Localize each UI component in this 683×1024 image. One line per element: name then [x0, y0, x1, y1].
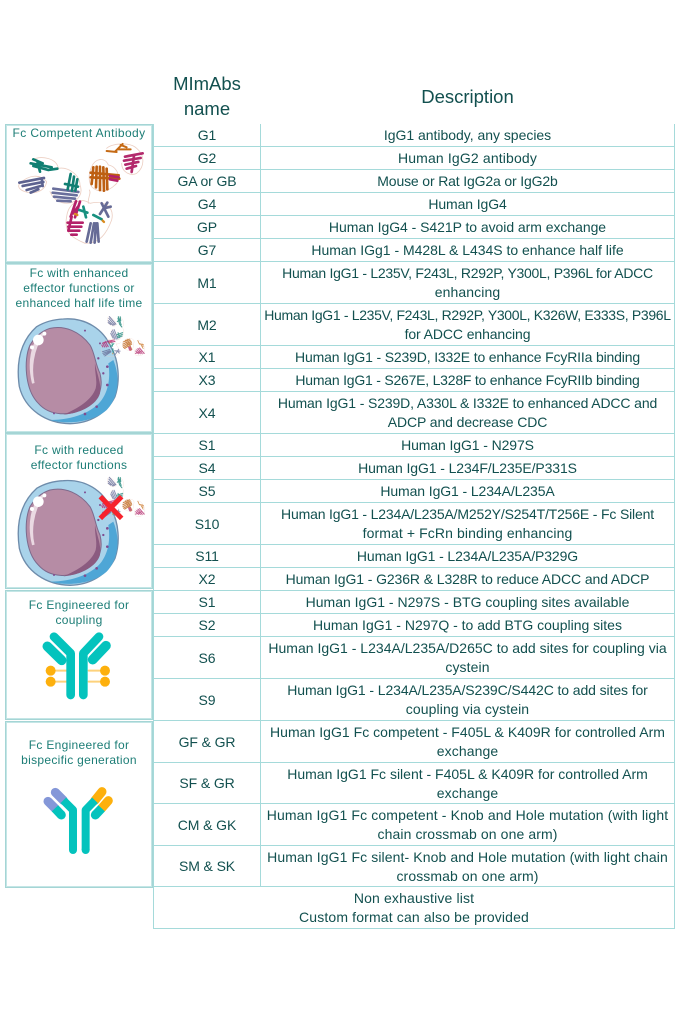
row S4: Human IgG1 - L234F/L235E/P331S [358, 460, 577, 476]
row G4: Human IgG4 [428, 196, 507, 212]
row S10: S10 [195, 516, 219, 532]
row S5: S5 [199, 483, 215, 499]
row GF & GR: GF & GR [179, 734, 235, 750]
panel heading: enhanced effector functions [16, 266, 142, 310]
row GF & GR: Human IgG1 Fc competent - F405L & K409R for controlled Arm [270, 724, 665, 740]
panel: Fc Engineered for bispecific generation [5, 721, 153, 888]
row S4: S4 [199, 460, 215, 476]
row G4: G4 [198, 196, 216, 212]
panel heading: coupling [29, 598, 129, 627]
row G2: G2 [198, 150, 216, 166]
panel: Fc Competent Antibody [5, 124, 153, 263]
row S1 coupling: Human IgG1 - N297S - BTG coupling sites available [306, 594, 629, 610]
row X4: Human IgG1 - S239D, A330L & I332E to enhanced ADCC and [278, 395, 657, 411]
row CM & GK: CM & GK [178, 816, 236, 832]
footer note: Non exhaustive list [354, 890, 474, 906]
row GA or GB: Mouse or Rat IgG2a or IgG2b [377, 173, 558, 189]
panel heading: bispecific generation [21, 738, 137, 767]
row S5 [153, 480, 675, 503]
panel heading: enhanced effector functions: effector functions or [23, 281, 135, 295]
row G1: G1 [198, 127, 216, 143]
panel: Fc with enhanced effector functions [5, 263, 153, 433]
row G2 [153, 147, 675, 170]
row S2: S2 [199, 617, 215, 633]
header: MImAbs name: name [184, 98, 230, 119]
row S9: Human IgG1 - L234A/L235A/S239C/S442C to add sites for [287, 682, 648, 698]
panel: Fc with reduced effector functions [5, 433, 153, 589]
row S1 [153, 434, 675, 457]
row S1: Human IgG1 - N297S [401, 437, 534, 453]
row X4 [153, 392, 675, 434]
row S6: Human IgG1 - L234A/L235A/D265C to add sites for coupling via [268, 640, 667, 656]
row G4 [153, 193, 675, 216]
row S10: format + FcRn binding enhancing [363, 525, 572, 541]
row M2: M2 [197, 316, 217, 332]
row CM & GK [153, 804, 675, 846]
row X1 [153, 346, 675, 369]
header: MImAbs name: MImAbs [173, 73, 241, 94]
row S5: Human IgG1 - L234A/L235A [380, 483, 555, 499]
row M1: M1 [197, 274, 217, 290]
row SM & SK: Human IgG1 Fc silent- Knob and Hole mutation (with light chain [267, 848, 668, 864]
row S1 coupling [153, 591, 675, 614]
panel heading: bispecific generation: Fc Engineered for [29, 738, 129, 752]
row S6: cystein [445, 659, 490, 675]
row M1: Human IgG1 - L235V, F243L, R292P, Y300L, P396L for ADCC [282, 265, 653, 281]
row S2: Human IgG1 - N297Q - to add BTG coupling sites [313, 617, 622, 633]
row G1 [153, 124, 675, 147]
row G1: IgG1 antibody, any species [384, 127, 551, 143]
row S9: S9 [199, 692, 215, 708]
row G2: Human IgG2 antibody [398, 150, 537, 166]
header: MImAbs name [173, 73, 241, 119]
row S1 coupling: S1 [199, 594, 215, 610]
panel heading: coupling: Fc Engineered for [29, 598, 129, 612]
row S2 [153, 614, 675, 637]
row SM & SK: crossmab on one arm) [396, 868, 539, 884]
panel heading: reduced effector functions: Fc with reduced [34, 443, 124, 457]
row X4: ADCP and decrease CDC [388, 414, 547, 430]
row S4 [153, 457, 675, 480]
row SF & GR: exchange [437, 784, 498, 800]
row X2: Human IgG1 - G236R & L328R to reduce ADCC and ADCP [286, 571, 649, 587]
row S9 [153, 679, 675, 721]
row GP [153, 216, 675, 239]
row G7 [153, 239, 675, 262]
row M2: for ADCC enhancing [405, 326, 530, 342]
row GF & GR: exchange [437, 743, 498, 759]
row X1: X1 [199, 349, 215, 365]
row SF & GR: SF & GR [179, 775, 235, 791]
row GA or GB [153, 170, 675, 193]
panel heading: Fc Competent Antibody: Fc Competent Antibody [13, 126, 145, 140]
row S11 [153, 545, 675, 568]
row G7: G7 [198, 242, 216, 258]
row M2: Human IgG1 - L235V, F243L, R292P, Y300L, K326W, E333S, P396L [264, 307, 671, 323]
row SM & SK [153, 846, 675, 887]
panel heading: enhanced effector functions: Fc with enhanced [30, 266, 128, 280]
row GP: Human IgG4 - S421P to avoid arm exchange [329, 219, 606, 235]
row S1: S1 [199, 437, 215, 453]
row X1: Human IgG1 - S239D, I332E to enhance FcyRIIa binding [295, 349, 640, 365]
row S10: Human IgG1 - L234A/L235A/M252Y/S254T/T256E - Fc Silent [281, 506, 654, 522]
row S11: S11 [195, 548, 219, 564]
row SF & GR: Human IgG1 Fc silent - F405L & K409R for controlled Arm [287, 766, 648, 782]
panel heading: enhanced effector functions: enhanced half life time [16, 296, 142, 310]
row M1: enhancing [435, 284, 500, 300]
row S10 [153, 503, 675, 545]
footer note: Custom format can also be provided [299, 909, 529, 925]
row GA or GB: GA or GB [177, 173, 237, 189]
row X2: X2 [199, 571, 215, 587]
row CM & GK: chain crossmab on one arm) [377, 826, 558, 842]
row S9: coupling via cystein [406, 701, 529, 717]
row X3 [153, 369, 675, 392]
row S6: S6 [199, 650, 215, 666]
row GF & GR [153, 721, 675, 763]
panel: Fc Engineered for coupling [5, 590, 153, 720]
row S6 [153, 637, 675, 679]
panel heading: reduced effector functions [31, 443, 127, 472]
row M2 [153, 304, 675, 346]
row X4: X4 [199, 404, 215, 420]
panel heading: coupling: coupling [55, 613, 103, 627]
row SF & GR [153, 763, 675, 804]
row G7: Human IGg1 - M428L & L434S to enhance half life [311, 242, 624, 258]
footer note [153, 887, 675, 929]
row GP: GP [197, 219, 217, 235]
panel heading: bispecific generation: bispecific generation [21, 753, 137, 767]
row X2 [153, 568, 675, 591]
row S11: Human IgG1 - L234A/L235A/P329G [357, 548, 578, 564]
row CM & GK: Human IgG1 Fc competent - Knob and Hole mutation (with light [267, 807, 668, 823]
row X3: X3 [199, 372, 215, 388]
header: Description: Description [421, 86, 514, 107]
row X3: Human IgG1 - S267E, L328F to enhance FcyRIIb binding [295, 372, 640, 388]
row M1 [153, 262, 675, 304]
panel heading: reduced effector functions: effector functions [31, 458, 127, 472]
row SM & SK: SM & SK [179, 858, 235, 874]
